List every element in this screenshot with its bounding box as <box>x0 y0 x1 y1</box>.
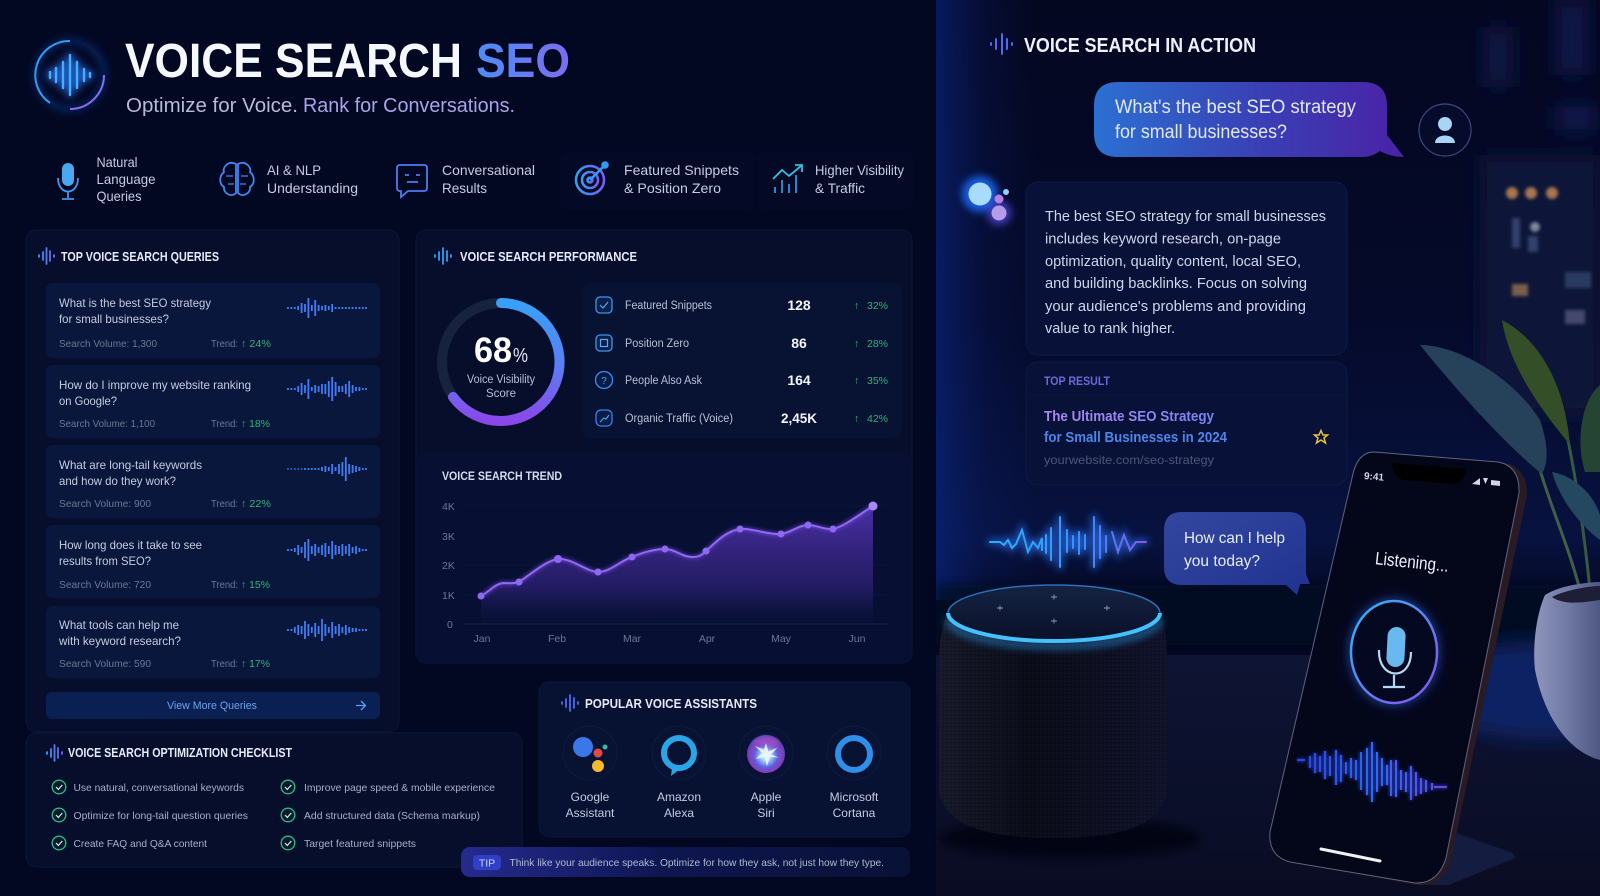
assistant answer card: optimization, quality content, local SEO, <box>1045 253 1301 270</box>
right scene: room background with bokeh, table and plant <box>936 0 1600 896</box>
line chart: voice search trend: Feb <box>548 633 566 645</box>
query card 5: with keyword research? <box>58 634 181 648</box>
subtitle <box>126 95 515 117</box>
icon: star <box>1314 430 1328 443</box>
feature: featured snippets and position zero: Featured Snippets <box>624 162 739 178</box>
tip bar: TIP <box>479 858 495 870</box>
feature: featured snippets and position zero <box>576 162 739 196</box>
metric: position zero: Position Zero <box>625 338 689 350</box>
metric: position zero: 28% <box>867 338 888 350</box>
assistant speech bubble: you today? <box>1184 553 1260 570</box>
assistant speech bubble <box>1164 512 1310 595</box>
user speech bubble <box>1094 82 1404 157</box>
feature: higher visibility and traffic: Higher Visibility <box>815 162 904 178</box>
line chart: voice search trend: Mar <box>623 633 642 645</box>
line chart: voice search trend: 1K <box>442 590 455 602</box>
query card 1 <box>46 283 380 358</box>
smartphone on stand <box>1270 452 1527 885</box>
assistant: amazon alexa: Alexa <box>664 806 694 820</box>
donut: voice visibility score 68%: Voice Visibility <box>467 374 535 386</box>
metric: people also ask: ↑ <box>854 375 859 387</box>
line chart: voice search trend: 4K <box>442 501 455 513</box>
top result card: yourwebsite.com/seo-strategy <box>1044 453 1214 467</box>
subtitle: Rank for Conversations. <box>303 95 515 117</box>
home indicator <box>1321 849 1380 861</box>
assistant: microsoft cortana: Microsoft <box>830 790 879 804</box>
assistant answer card: value to rank higher. <box>1045 320 1175 337</box>
feature: natural language queries: Language <box>96 171 156 187</box>
metric: featured snippets: Featured Snippets <box>625 300 712 312</box>
line chart: voice search trend: 3K <box>442 531 455 543</box>
query card 3: and how do they work? <box>59 474 176 488</box>
line chart: voice search trend: Jun <box>849 633 866 645</box>
heading: top voice search queries: TOP VOICE SEARCH QUERIES <box>61 250 219 264</box>
top result card: TOP RESULT <box>1044 376 1110 388</box>
query card 3: What are long-tail keywords <box>59 458 202 472</box>
query card 4: How long does it take to see <box>59 538 202 552</box>
assistant: microsoft cortana <box>827 726 881 820</box>
feature: natural language queries <box>58 154 156 204</box>
checklist items: Optimize for long-tail question queries <box>74 810 248 822</box>
assistant: amazon alexa: Amazon <box>657 790 701 804</box>
metric: organic traffic (voice): 42% <box>867 413 888 425</box>
query card 2: Search Volume: 1,100 <box>59 418 155 430</box>
metric: people also ask <box>596 372 888 388</box>
view more queries button <box>46 692 380 719</box>
assistant answer card: your audience's problems and providing <box>1045 298 1306 315</box>
feature: conversational results: Results <box>442 180 487 196</box>
query card 3 <box>46 445 380 518</box>
donut: voice visibility score 68%: 68 <box>474 331 512 370</box>
microphone button <box>1332 582 1456 722</box>
feature: higher visibility and traffic: & Traffic <box>815 180 865 196</box>
metric: people also ask: 35% <box>867 375 888 387</box>
query card 2: How do I improve my website ranking <box>59 378 251 392</box>
panel: voice search performance <box>416 230 912 663</box>
donut: voice visibility score 68% <box>442 303 560 421</box>
metric: organic traffic (voice): 2,45K <box>781 410 817 426</box>
assistant: amazon alexa <box>652 726 706 820</box>
assistant answer card: includes keyword research, on-page <box>1045 230 1281 248</box>
query card 5: What tools can help me <box>59 618 179 632</box>
heading: top voice search queries <box>39 248 219 264</box>
donut: voice visibility score 68%: % <box>513 345 528 367</box>
user speech bubble: What's the best SEO strategy <box>1115 97 1356 118</box>
panel: voice search optimization checklist <box>26 733 522 867</box>
metric: people also ask: ? <box>601 376 607 387</box>
title: SEO <box>476 35 570 88</box>
metrics table <box>582 283 902 438</box>
query card 3: ↑ 22% <box>241 498 271 510</box>
assistant answer card: and building backlinks. Focus on solving <box>1045 275 1307 292</box>
feature strip <box>58 152 913 210</box>
speaker buttons <box>997 594 1110 624</box>
query card 5 <box>46 606 380 678</box>
phone status bar: 9:41 <box>1363 471 1385 484</box>
metric: organic traffic (voice): Organic Traffic (Voice) <box>625 413 733 425</box>
line chart: voice search trend: 0 <box>447 619 453 631</box>
phone sound wave <box>1297 742 1447 802</box>
query card 3: Trend: <box>211 498 238 510</box>
query card 4: ↑ 15% <box>241 579 270 591</box>
assistant answer card <box>1026 182 1347 355</box>
assistant answer card: The best SEO strategy for small businesses <box>1045 208 1326 225</box>
query card 2: on Google? <box>59 394 117 408</box>
query card 5: ↑ 17% <box>241 658 270 670</box>
metric: position zero <box>596 335 888 351</box>
checklist items: Use natural, conversational keywords <box>74 782 244 794</box>
feature: AI and NLP understanding: AI & NLP <box>267 162 321 178</box>
line chart: voice search trend <box>417 453 911 662</box>
checklist items: Improve page speed & mobile experience <box>304 782 495 794</box>
metric: organic traffic (voice): ↑ <box>854 413 859 425</box>
assistant: google assistant: Assistant <box>566 806 615 820</box>
assistant: microsoft cortana: Cortana <box>833 806 876 820</box>
user speech bubble: for small businesses? <box>1115 122 1287 143</box>
query card 2: ↑ 18% <box>241 418 270 430</box>
line chart: voice search trend: Jan <box>474 633 491 645</box>
query card 4 <box>46 525 380 598</box>
line chart: voice search trend: VOICE SEARCH TREND <box>442 471 562 483</box>
top result card: for Small Businesses in 2024 <box>1044 430 1227 446</box>
heading: popular voice assistants: POPULAR VOICE ASSISTANTS <box>585 697 757 711</box>
panel: top voice search queries <box>26 230 399 732</box>
heading: checklist: VOICE SEARCH OPTIMIZATION CHECKLIST <box>68 746 292 760</box>
metric: people also ask: People Also Ask <box>625 375 702 387</box>
metric: position zero: 86 <box>791 335 807 351</box>
checklist items: Add structured data (Schema markup) <box>304 810 480 822</box>
metric: featured snippets: ↑ <box>854 300 859 312</box>
tip bar <box>461 847 910 877</box>
query card 1: Trend: <box>211 338 238 350</box>
phone notch <box>1392 463 1466 484</box>
metric: featured snippets: 32% <box>867 300 888 312</box>
feature: natural language queries: Natural <box>96 154 138 170</box>
assistant: apple siri: Apple <box>751 790 782 804</box>
feature: AI and NLP understanding: Understanding <box>267 180 358 196</box>
heading: voice search in action: VOICE SEARCH IN ACTION <box>1024 35 1256 57</box>
line chart: voice search trend: 2K <box>442 560 455 572</box>
panel: popular voice assistants <box>539 682 910 837</box>
assistant: google assistant <box>563 726 617 820</box>
feature: conversational results: Conversational <box>442 162 535 178</box>
metric: organic traffic (voice) <box>596 410 888 426</box>
query card 1: What is the best SEO strategy <box>59 296 211 310</box>
checklist items <box>52 780 495 850</box>
query card 4: Trend: <box>211 579 238 591</box>
view more queries button: View More Queries <box>167 700 257 712</box>
sound wave above speaker <box>990 517 1146 567</box>
metric: people also ask: 164 <box>787 372 811 388</box>
title: VOICE SEARCH <box>125 35 462 88</box>
assistant: google assistant: Google <box>571 790 610 804</box>
query card 1: Search Volume: 1,300 <box>59 338 157 350</box>
query card 4: Search Volume: 720 <box>59 579 151 591</box>
feature: AI and NLP understanding <box>220 162 358 196</box>
query card 2 <box>46 365 380 438</box>
query card 5: Trend: <box>211 658 238 670</box>
plant pot <box>1534 582 1600 760</box>
metric: featured snippets <box>596 297 888 313</box>
donut: voice visibility score 68%: Score <box>486 388 516 400</box>
feature: conversational results <box>397 162 535 197</box>
feature: featured snippets and position zero: & Position Zero <box>624 180 721 196</box>
smart speaker <box>939 585 1200 858</box>
line chart: voice search trend: May <box>771 633 792 645</box>
icon: user avatar <box>1419 104 1471 156</box>
metric: position zero: ↑ <box>854 338 859 350</box>
query card 5: Search Volume: 590 <box>59 658 151 670</box>
metric: featured snippets: 128 <box>787 297 811 313</box>
checklist items: Target featured snippets <box>304 838 416 850</box>
icon: assistant dots <box>962 176 1011 225</box>
top result card <box>1026 362 1347 485</box>
assistant speech bubble: How can I help <box>1184 530 1285 547</box>
query card 3: Search Volume: 900 <box>59 498 151 510</box>
listening label: Listening... <box>1374 548 1450 576</box>
query card 1: for small businesses? <box>59 312 169 326</box>
top result card: The Ultimate SEO Strategy <box>1044 409 1214 425</box>
heading: voice search performance: VOICE SEARCH PERFORMANCE <box>460 250 637 264</box>
query card 4: results from SEO? <box>59 554 151 568</box>
subtitle: Optimize for Voice. <box>126 95 298 117</box>
query card 2: Trend: <box>211 418 238 430</box>
plant <box>1420 320 1600 590</box>
feature: natural language queries: Queries <box>96 188 142 204</box>
tip bar: Think like your audience speaks. Optimize for how they ask, not just how they type. <box>510 857 884 869</box>
header logo: circular voice wave <box>35 41 104 109</box>
query card 1: ↑ 24% <box>241 338 271 350</box>
line chart: voice search trend: Apr <box>699 633 716 645</box>
assistant: apple siri: Siri <box>757 806 775 820</box>
checklist items: Create FAQ and Q&A content <box>74 838 207 850</box>
assistant: apple siri <box>739 726 793 820</box>
feature: higher visibility and traffic <box>773 162 904 196</box>
